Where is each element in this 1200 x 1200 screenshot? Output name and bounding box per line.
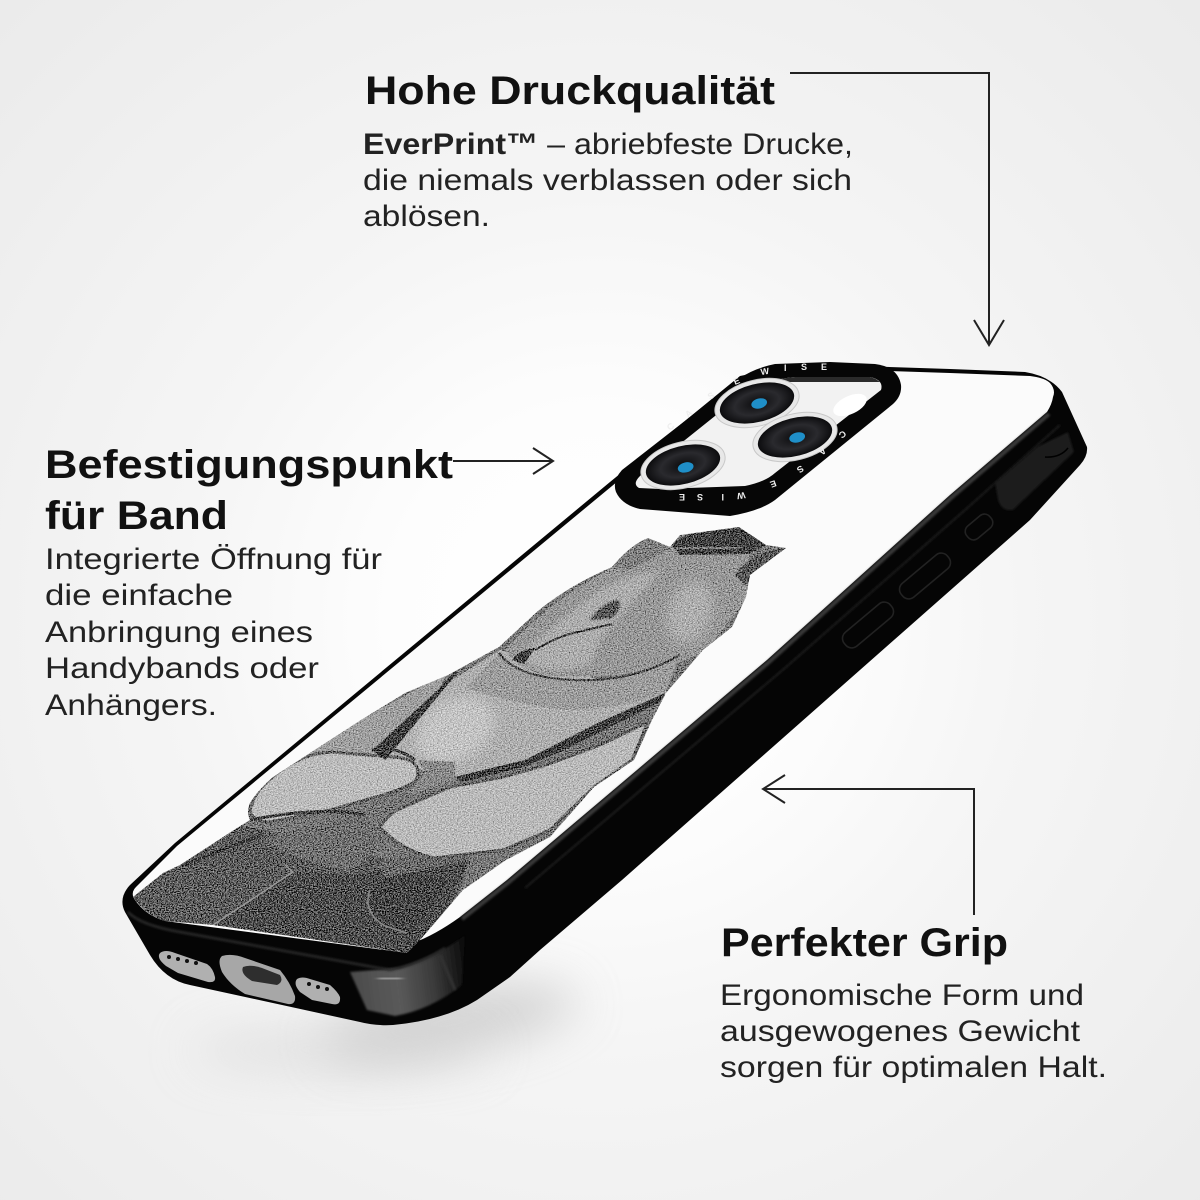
pocket line: [368, 890, 407, 933]
arrow: grip: [763, 775, 974, 915]
heading: Hohe Druckqualität: [365, 69, 775, 113]
brand text: I: [721, 492, 724, 502]
mute switch: [995, 432, 1074, 510]
body text: [720, 979, 1107, 1084]
body text: [45, 543, 382, 722]
dark straps: [375, 672, 456, 758]
body text: [363, 128, 853, 233]
body text: ausgewogenes Gewicht: [720, 1015, 1081, 1048]
brand text: A: [683, 407, 695, 420]
heading: Perfekter Grip: [721, 921, 1008, 965]
left ear: [612, 538, 672, 570]
heading: für Band: [45, 494, 228, 538]
phone shadow: [190, 970, 583, 1074]
case body: [122, 364, 1087, 1025]
sweater torso: [380, 650, 670, 778]
arm right: [380, 722, 648, 858]
body text: die niemals verblassen oder sich: [363, 164, 852, 197]
callout: print quality: [363, 69, 853, 233]
body text: Anhängers.: [45, 689, 217, 722]
lens top: [710, 370, 804, 436]
brand text: W: [736, 490, 746, 501]
upper sleeve: [308, 676, 446, 755]
brand text: S: [706, 390, 716, 402]
bump frame: [615, 362, 901, 516]
arrow: print quality: [790, 73, 1004, 345]
body text: ablösen.: [363, 200, 490, 233]
case rim highlight: [462, 414, 1049, 919]
body text: die einfache: [45, 579, 233, 612]
brand text: E: [821, 362, 827, 372]
hat: [672, 527, 770, 555]
callout: strap attachment: [45, 443, 453, 722]
callout: grip: [720, 921, 1107, 1084]
arrow: strap attachment: [453, 448, 553, 474]
brand text: E: [679, 492, 685, 502]
heading: [45, 443, 453, 538]
bear artwork: [120, 520, 800, 970]
creases: [250, 749, 415, 820]
speaker left: [159, 951, 215, 982]
brand text: I: [784, 363, 787, 373]
brand text: [665, 362, 848, 502]
brand text: E: [732, 375, 741, 387]
arm left: [250, 752, 418, 822]
brand text: A: [816, 445, 828, 458]
trouser seam: [213, 865, 293, 925]
brand text: C: [665, 420, 677, 433]
bottom rim line: [128, 912, 445, 970]
right ear: [735, 548, 786, 585]
heading: Befestigungspunkt: [45, 443, 453, 487]
body text: Ergonomische Form und: [720, 979, 1084, 1012]
speaker right: [296, 978, 340, 1004]
case back: [133, 368, 1054, 953]
nose and mouth: [512, 648, 535, 664]
charging port: [220, 955, 295, 1004]
cuff: [408, 760, 455, 795]
lens left: [636, 432, 730, 498]
body text: Handybands oder: [45, 652, 319, 685]
action button: [962, 511, 996, 543]
bump window: [636, 377, 882, 489]
body text: Anbringung eines: [45, 616, 313, 649]
art base: [241, 527, 786, 898]
brand text: S: [795, 463, 806, 475]
pocket: [369, 870, 450, 935]
brand text: S: [697, 492, 703, 502]
corner sheen: [350, 935, 465, 1016]
brand text: C: [836, 428, 848, 441]
volume up: [896, 550, 954, 602]
flash: [830, 389, 870, 421]
volume down: [839, 599, 897, 651]
brand text: W: [760, 366, 770, 377]
belly band: [262, 812, 385, 872]
camera bump: [615, 362, 901, 516]
body text: sorgen für optimalen Halt.: [720, 1051, 1107, 1084]
brand text: E: [769, 478, 778, 490]
side buttons: [839, 511, 996, 651]
brand text: S: [801, 362, 807, 372]
collar: [466, 653, 680, 710]
body text: EverPrint™ – abriebfeste Drucke,: [363, 128, 853, 161]
body text: Integrierte Öffnung für: [45, 543, 382, 576]
head: [505, 540, 750, 677]
phone case: [122, 364, 1087, 1025]
trousers: [133, 825, 469, 925]
lens right: [748, 404, 842, 470]
